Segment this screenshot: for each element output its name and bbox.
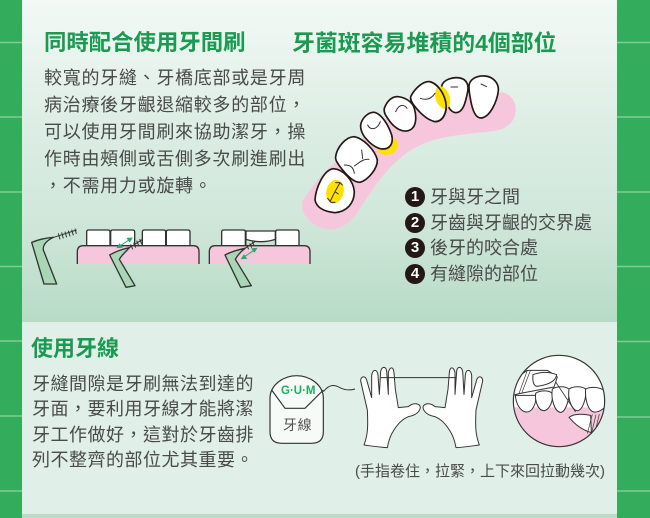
text block: floss instructions: 列不整齊的部位尤其重要。 <box>32 450 254 470</box>
list item 2: 牙齒與牙齦的交界處 <box>430 213 592 233</box>
illustration: hands holding floss <box>360 366 484 448</box>
plaque spot on gum <box>375 134 401 158</box>
heading: use interdental brush: 同時配合使用牙間刷 <box>44 30 246 55</box>
tooth edges over plaque <box>430 82 446 122</box>
list item 1: 牙與牙之間 <box>430 187 520 207</box>
gum <box>302 92 516 229</box>
tooth 5 <box>411 82 446 122</box>
panel: interdental brush <box>22 0 617 322</box>
text block: brush instructions: 可以使用牙間刷來協助潔牙，操 <box>44 122 306 142</box>
left green border <box>0 0 22 518</box>
list item 2: 2 <box>411 214 419 231</box>
bottom strip <box>22 514 617 518</box>
tooth 7 <box>469 76 498 118</box>
tooth grooves <box>328 84 487 202</box>
list item 1: 1 <box>411 188 419 205</box>
list item 3: 3 <box>411 239 419 256</box>
list item 4: 4 <box>411 265 419 282</box>
text block: floss instructions <box>32 374 254 470</box>
right hand <box>423 367 483 448</box>
tooth 6 <box>442 78 468 113</box>
list item 3: 後牙的咬合處 <box>430 238 538 258</box>
step 1 teeth and gum <box>77 230 199 287</box>
text block: brush instructions: 較寬的牙縫、牙橋底部或是牙周 <box>44 68 306 88</box>
heading: use floss: 使用牙線 <box>31 336 119 361</box>
caption: flossing steps: (手指卷住，拉緊，上下來回拉動幾次) <box>355 463 605 480</box>
text block: brush instructions: 病治療後牙齦退縮較多的部位， <box>44 95 306 115</box>
floss line <box>381 376 457 379</box>
plaque spots on teeth <box>324 178 346 206</box>
text block: floss instructions: 牙縫間隙是牙刷無法到達的 <box>32 374 254 394</box>
illustration: flossing close-up <box>512 354 606 448</box>
panel: dental floss <box>22 322 617 514</box>
text block: floss instructions: 牙面，要利用牙線才能將潔 <box>32 399 254 419</box>
text block: brush instructions: 作時由頰側或舌側多次刷進刷出 <box>44 149 306 169</box>
text block: brush instructions <box>44 68 306 196</box>
right green border <box>617 0 650 518</box>
list item 4: 有縫隙的部位 <box>430 264 538 284</box>
tooth 2 <box>336 137 377 182</box>
left hand <box>361 367 420 448</box>
list: four areas <box>405 187 592 284</box>
tooth 4 <box>384 97 416 131</box>
tooth 3 <box>361 112 392 149</box>
text block: brush instructions: ，不需用力或旋轉。 <box>44 176 212 196</box>
icon: GUM floss box <box>269 375 356 444</box>
step 2 teeth and gum <box>209 230 310 287</box>
heading: plaque-prone areas: 牙菌斑容易堆積的4個部位 <box>292 30 557 56</box>
step 2 arrow <box>242 248 257 259</box>
illustration: dental arch with plaque spots <box>302 75 516 230</box>
GUM logo: G·U·M <box>281 385 316 397</box>
tooth 1 <box>315 169 354 213</box>
step 1 arrow <box>117 238 132 248</box>
floss label: 牙線 <box>283 417 312 433</box>
text block: floss instructions: 牙工作做好，這對於牙齒排 <box>32 424 254 444</box>
brush alone <box>32 229 77 284</box>
illustration: brush usage steps <box>31 228 311 288</box>
